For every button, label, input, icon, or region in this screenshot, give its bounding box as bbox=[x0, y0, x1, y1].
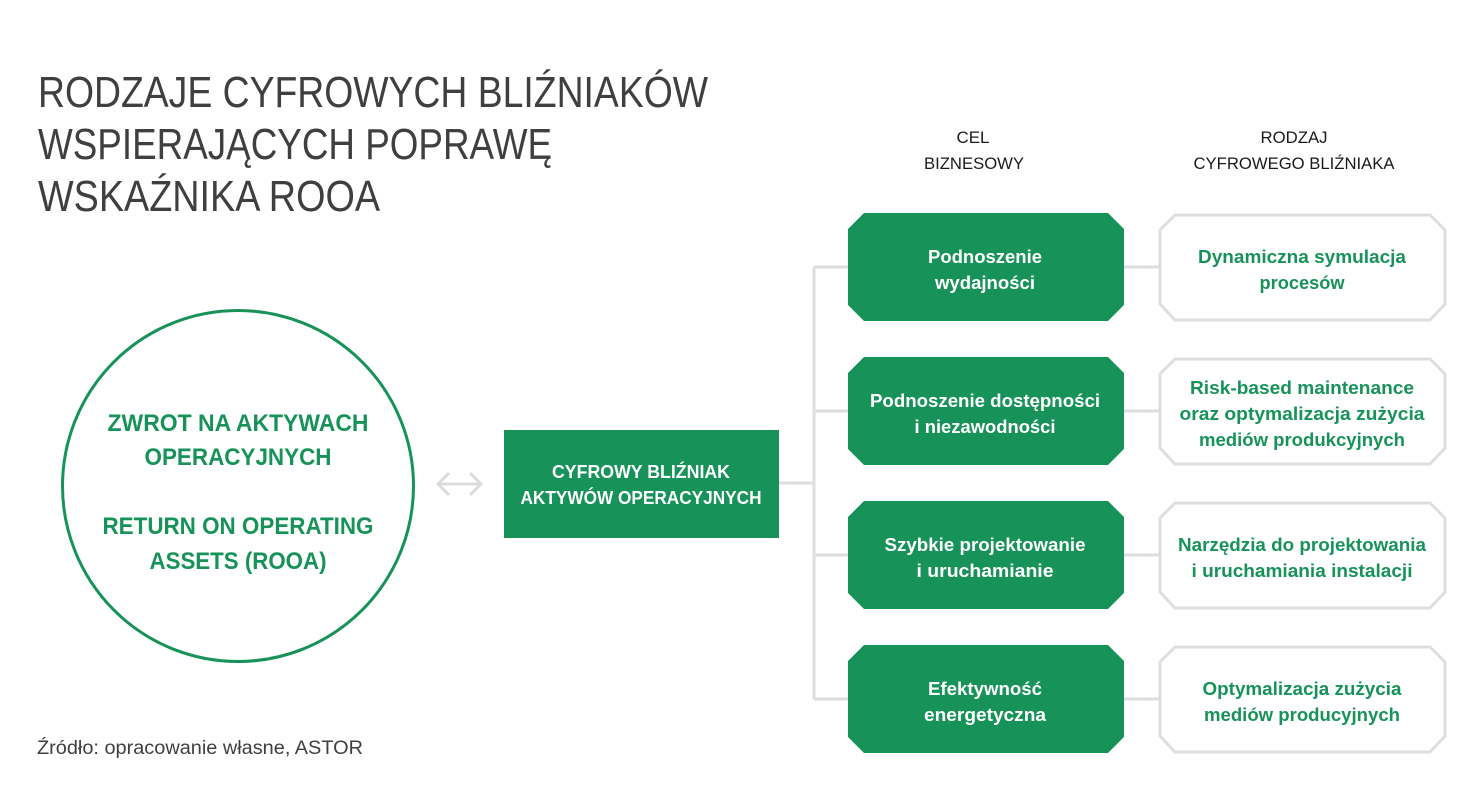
central box: cyfrowy bliźniak: AKTYWÓW OPERACYJNYCH bbox=[520, 487, 762, 508]
goal box 4 bbox=[848, 645, 1124, 753]
twin type box 2: Risk-based maintenance bbox=[1190, 378, 1414, 398]
column heading: cel biznesowy bbox=[924, 128, 1024, 173]
twin type box 3: i uruchamiania instalacji bbox=[1192, 561, 1412, 581]
circle: return on operating assets bbox=[62, 310, 414, 662]
goal box 3: Szybkie projektowanie bbox=[884, 535, 1086, 555]
title: WSPIERAJĄCYCH POPRAWĘ bbox=[38, 120, 552, 169]
column heading: cel biznesowy: CEL bbox=[956, 128, 990, 147]
column heading: cel biznesowy: BIZNESOWY bbox=[924, 154, 1024, 173]
twin type box 3: Narzędzia do projektowania bbox=[1178, 535, 1427, 555]
title bbox=[38, 68, 708, 221]
column heading: rodzaj cyfrowego bliźniaka: CYFROWEGO BLIŹNIAKA bbox=[1194, 154, 1395, 173]
circle: return on operating assets: OPERACYJNYCH bbox=[144, 444, 332, 471]
central box: cyfrowy bliźniak bbox=[504, 430, 779, 538]
source note: Źródło: opracowanie własne, ASTOR bbox=[37, 738, 363, 759]
connector lines bbox=[779, 267, 1159, 699]
twin type box 3 bbox=[1160, 503, 1445, 608]
goal box 2 bbox=[848, 357, 1124, 465]
goal box 3: i uruchamianie bbox=[916, 561, 1054, 581]
goal box 1: wydajności bbox=[934, 273, 1035, 293]
twin type box 1: procesów bbox=[1260, 273, 1346, 293]
title: WSKAŹNIKA ROOA bbox=[38, 172, 381, 221]
column heading: rodzaj cyfrowego bliźniaka bbox=[1194, 128, 1395, 173]
circle: return on operating assets: ASSETS (ROOA) bbox=[150, 548, 326, 575]
circle: return on operating assets: ZWROT NA AKTYWACH bbox=[108, 410, 368, 437]
twin type box 1: Dynamiczna symulacja bbox=[1198, 247, 1407, 267]
goal box 2: Podnoszenie dostępności bbox=[870, 391, 1100, 411]
icon: double arrow bbox=[438, 473, 481, 495]
twin type box 2: oraz optymalizacja zużycia bbox=[1180, 404, 1426, 424]
title: RODZAJE CYFROWYCH BLIŹNIAKÓW bbox=[38, 68, 708, 117]
twin type box 4: mediów producyjnych bbox=[1204, 705, 1400, 725]
twin type box 2: mediów produkcyjnych bbox=[1199, 430, 1405, 450]
goal box 2: i niezawodności bbox=[914, 417, 1056, 437]
goal box 4: energetyczna bbox=[924, 705, 1047, 725]
column heading: rodzaj cyfrowego bliźniaka: RODZAJ bbox=[1260, 128, 1328, 147]
twin type box 4: Optymalizacja zużycia bbox=[1202, 679, 1403, 699]
twin type box 1 bbox=[1160, 215, 1445, 320]
central box: cyfrowy bliźniak: CYFROWY BLIŹNIAK bbox=[552, 461, 730, 482]
circle: return on operating assets: RETURN ON OPERATING bbox=[102, 513, 374, 540]
goal box 1: Podnoszenie bbox=[928, 247, 1042, 267]
twin type box 2 bbox=[1160, 359, 1445, 464]
goal box 3 bbox=[848, 501, 1124, 609]
goal box 1 bbox=[848, 213, 1124, 321]
twin type box 4 bbox=[1160, 647, 1445, 752]
goal box 4: Efektywność bbox=[928, 679, 1042, 699]
